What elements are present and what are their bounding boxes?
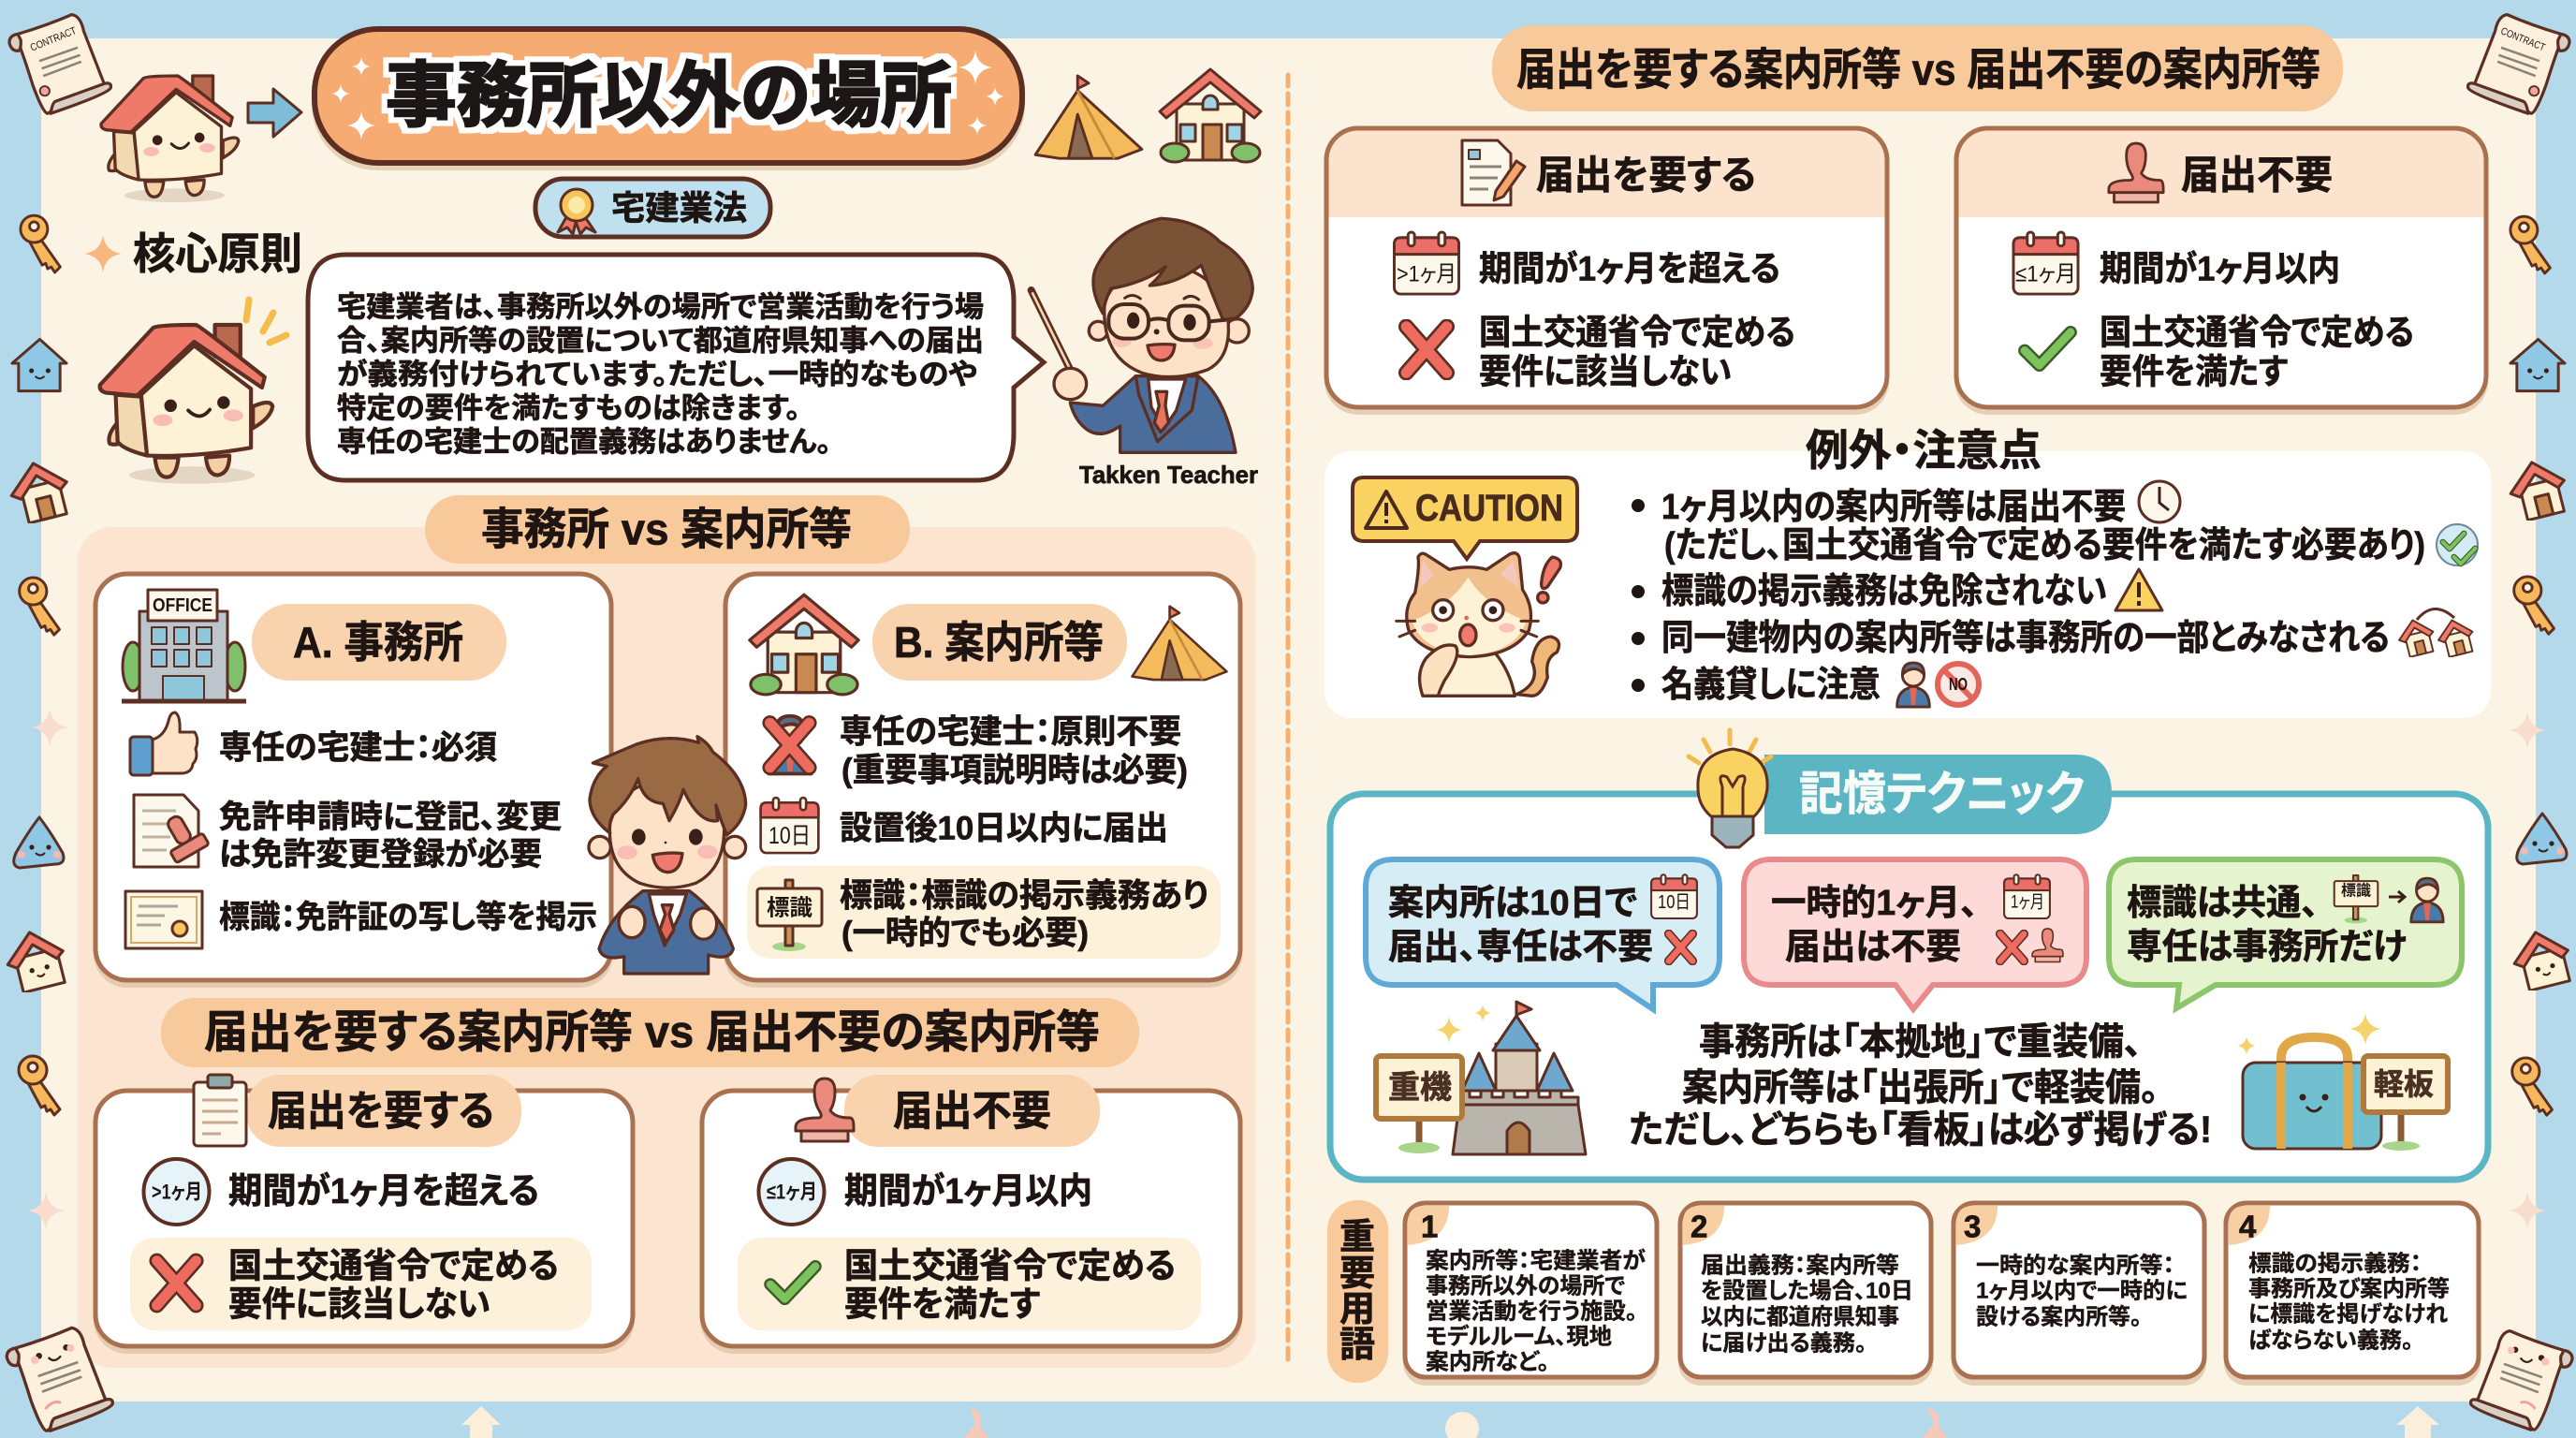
character: cheering boy <box>589 737 746 974</box>
bubble: 標識は共通: 専任は事務所だけ <box>2127 928 2407 967</box>
heading pill: 事務所 vs 案内所等 <box>425 495 910 564</box>
icon: suitcase with sign: 軽板 <box>2374 1067 2434 1101</box>
panel: 記憶テクニック <box>1330 730 2488 1180</box>
item: certificate: 標識：免許証の写し等を掲示 <box>219 900 597 935</box>
bubble: 案内所は10日で: 届出、専任は不要 <box>1388 928 1653 967</box>
heading pill: 記憶テクニック: 記憶テクニック <box>1799 768 2085 820</box>
term card 1: 1 <box>1421 1210 1438 1243</box>
pill: B. 案内所等: B. 案内所等 <box>894 618 1104 667</box>
list: exceptions: 同一建物内の案内所等は事務所の一部とみなされる <box>1661 619 2390 658</box>
character: Takken Teacher <box>1032 218 1258 489</box>
list: exceptions: (ただし、国土交通省令で定める要件を満たす必要あり) <box>1664 526 2425 565</box>
speech bubble: core principle: 宅建業者は、事務所以外の場所で営業活動を行う場 <box>337 290 984 324</box>
item: meeting requirement <box>738 1238 1201 1330</box>
item: not meeting requirement <box>1406 313 1795 391</box>
card: 届出不要 (right) <box>1954 128 2488 415</box>
speech bubble: core principle: 専任の宅建士の配置義務はありません。 <box>337 425 831 459</box>
icon: contract scroll top left: CONTRACT <box>29 25 79 54</box>
icon: house <box>750 594 858 695</box>
icon: clock <box>2139 481 2180 522</box>
item: within one month <box>2013 232 2340 294</box>
title banner: 事務所以外の場所 <box>386 56 952 137</box>
icon: tent <box>1133 607 1226 680</box>
bubble: 一時的1ヶ月: 1ヶ月 <box>2011 893 2044 912</box>
item: meeting requirement: 要件を満たす <box>844 1284 1040 1324</box>
card: 届出不要 <box>700 1075 1242 1354</box>
pill: 届出を要する <box>246 1075 521 1147</box>
heading pill: right side comparison: 届出を要する案内所等 vs 届出不要の案内所等 <box>1516 45 2320 94</box>
icon: person and no sign: NO <box>1949 675 1968 694</box>
term card 1: 事務所以外の場所で <box>1426 1273 1625 1299</box>
item: 10 day calendar <box>761 798 1168 853</box>
icon: stamp <box>796 1078 854 1141</box>
card B: 案内所等 <box>724 574 1242 988</box>
icon: suitcase with sign <box>2237 1013 2448 1151</box>
term card 3: 3 <box>1964 1210 1981 1243</box>
heading pill: right side comparison <box>1492 25 2343 111</box>
icon: person and no sign <box>1897 663 1979 707</box>
term card 4: 事務所及び案内所等 <box>2248 1277 2450 1301</box>
label: 重要用語 <box>1327 1200 1388 1383</box>
item: not meeting requirement <box>130 1238 592 1330</box>
item: meeting requirement: 要件を満たす <box>2100 352 2288 391</box>
item: meeting requirement: 国土交通省令で定める <box>844 1247 1176 1284</box>
item: thumbs up: 専任の宅建士：必須 <box>219 730 497 766</box>
heading: 届出不要: 届出不要 <box>2181 154 2333 197</box>
pill: 届出を要する: 届出を要する <box>268 1088 494 1135</box>
icon: castle with sign: 重機 <box>1388 1070 1452 1106</box>
term card 3: 設ける案内所等。 <box>1976 1305 2142 1329</box>
list: exceptions: 1ヶ月以内の案内所等は届出不要 <box>1661 488 2126 527</box>
label: 重要用語: 語 <box>1339 1326 1375 1365</box>
item: period over one month: >1ヶ月 <box>152 1180 202 1204</box>
text: mnemonic: 案内所等は「出張所」で軽装備。 <box>1682 1067 2159 1108</box>
heading pill: 届出 vs 不要 <box>161 998 1139 1067</box>
item: over one month <box>1394 232 1780 294</box>
heading: 届出を要する: 届出を要する <box>1536 154 1756 197</box>
bubble: 標識は共通: 標識は共通、 <box>2127 884 2319 923</box>
label: 重要用語: 要 <box>1339 1255 1375 1294</box>
list: exceptions <box>1632 488 2425 705</box>
list: exceptions: 標識の掲示義務は免除されない <box>1661 572 2107 611</box>
term card 1 <box>1403 1203 1659 1386</box>
item: not meeting requirement: 要件に該当しない <box>228 1284 490 1324</box>
term card 4: に標識を掲げなけれ <box>2248 1301 2448 1328</box>
speech bubble: core principle: 合、案内所等の設置について都道府県知事への届出 <box>337 324 984 358</box>
item: no dedicated agent <box>768 713 1188 788</box>
term card 4: 4 <box>2239 1210 2257 1243</box>
bubble: 案内所は10日で: 10日 <box>1658 892 1690 913</box>
callout: caution sign <box>1353 477 1577 559</box>
icon: office building: OFFICE <box>153 595 212 616</box>
bubble: 標識は共通: 標識 <box>2341 882 2371 899</box>
icon: contract scroll top left <box>9 15 110 113</box>
bubble: 一時的1ヶ月 <box>1744 859 2086 1009</box>
item: sign obligation: 標識 <box>767 895 812 921</box>
term card 3 <box>1952 1203 2206 1386</box>
text: mnemonic: ただし、どちらも「看板」は必ず掲げる! <box>1629 1109 2212 1151</box>
term card 1: 案内所等：宅建業者が <box>1426 1247 1646 1273</box>
item: over one month: >1ヶ月 <box>1397 262 1456 286</box>
item: no dedicated agent: (重要事項説明時は必要) <box>842 753 1188 788</box>
icon: two houses with arrow <box>2395 609 2477 659</box>
item: sign obligation: (一時的でも必要) <box>842 916 1089 951</box>
item: 10 day calendar: 設置後10日以内に届出 <box>840 811 1168 846</box>
item: 10 day calendar: 10日 <box>768 823 811 849</box>
bubble: 案内所は10日で: 案内所は10日で <box>1388 884 1637 923</box>
bubble: 案内所は10日で <box>1366 859 1720 1009</box>
label: 重要用語: 用 <box>1339 1290 1375 1329</box>
item: license document <box>134 795 562 873</box>
item: not meeting requirement: 国土交通省令で定める <box>1479 313 1795 352</box>
term card 4 <box>2224 1203 2481 1386</box>
term card 3: 一時的な案内所等： <box>1976 1253 2174 1279</box>
pill: 届出不要 <box>844 1075 1100 1147</box>
item: within one month: 期間が1ヶ月以内 <box>2100 249 2340 288</box>
term card 3: 1ヶ月以内で一時的に <box>1976 1279 2188 1303</box>
panel: 例外・注意点 <box>1325 426 2491 718</box>
bubble: 一時的1ヶ月: 届出は不要 <box>1785 928 1961 967</box>
tag: 宅建業法: 宅建業法 <box>611 189 747 227</box>
term card 2: 2 <box>1690 1210 1707 1243</box>
item: period over one month <box>144 1159 539 1225</box>
item: period within one month <box>758 1159 1092 1225</box>
bubble: 標識は共通 <box>2109 859 2462 1008</box>
icon: castle with sign <box>1376 1002 1586 1154</box>
term card 2 <box>1678 1203 1933 1386</box>
icon: stamp <box>2109 143 2163 202</box>
heading: 例外・注意点: 例外・注意点 <box>1806 426 2042 475</box>
icon: light bulb <box>1689 730 1771 847</box>
tag: 宅建業法 <box>535 179 770 237</box>
heading pill: 記憶テクニック <box>1764 755 2112 834</box>
term card 1: モデルルーム、現地 <box>1426 1324 1612 1350</box>
character: Takken Teacher: Takken Teacher <box>1079 461 1258 489</box>
label: 重要用語: 重 <box>1339 1218 1375 1257</box>
term card 1: 営業活動を行う施設。 <box>1426 1299 1637 1324</box>
term card 2: を設置した場合、10日 <box>1701 1279 1913 1303</box>
item: sign obligation <box>747 866 1221 959</box>
item: period within one month: 期間が1ヶ月以内 <box>844 1172 1092 1211</box>
icon: cheering house character <box>100 300 286 484</box>
panel: 重要用語 <box>1327 1200 2481 1386</box>
item: sign obligation: 標識：標識の掲示義務あり <box>840 878 1208 914</box>
icon: contract scroll top right <box>2468 15 2569 113</box>
card: 届出を要する (right) <box>1325 128 1889 415</box>
icon: tent and house <box>1035 69 1261 162</box>
text: mnemonic: 事務所は「本拠地」で重装備、 <box>1699 1021 2142 1063</box>
text: mnemonic <box>1629 1021 2212 1151</box>
icon: double check <box>2437 524 2478 565</box>
item: meeting requirement <box>2025 313 2414 391</box>
icon: office building <box>122 590 246 701</box>
heading: 核心原則: 核心原則 <box>133 229 302 278</box>
list: exceptions: 名義貸しに注意 <box>1661 666 1881 705</box>
icon: scroll character bottom right <box>2471 1331 2572 1430</box>
speech bubble: core principle: 特定の要件を満たすものは除きます。 <box>337 391 800 425</box>
card: 届出を要する <box>94 1075 635 1354</box>
bubble: 一時的1ヶ月: 一時的1ヶ月、 <box>1771 884 1978 923</box>
heading pill: 事務所 vs 案内所等: 事務所 vs 案内所等 <box>481 504 852 554</box>
item: period within one month: ≤1ヶ月 <box>767 1180 817 1204</box>
item: thumbs up <box>130 712 497 775</box>
card A: 事務所 <box>94 574 613 988</box>
pill: A. 事務所 <box>252 604 506 681</box>
character: surprised cat <box>1397 553 1560 696</box>
item: certificate <box>125 891 597 948</box>
item: over one month: 期間が1ヶ月を超える <box>1479 249 1780 288</box>
term card 2: に届け出る義務。 <box>1701 1331 1866 1356</box>
pill: B. 案内所等 <box>872 604 1127 681</box>
pill: 届出不要: 届出不要 <box>893 1088 1051 1135</box>
heading pill: 届出 vs 不要: 届出を要する案内所等 vs 届出不要の案内所等 <box>204 1007 1100 1058</box>
icon: house character with arrow <box>101 76 301 202</box>
icon: contract scroll top right: CONTRACT <box>2499 25 2547 53</box>
item: license document: は免許変更登録が必要 <box>219 836 542 873</box>
item: license document: 免許申請時に登記、変更 <box>219 800 562 835</box>
callout: caution sign: CAUTION <box>1415 488 1563 529</box>
item: not meeting requirement: 要件に該当しない <box>1479 352 1732 391</box>
item: period over one month: 期間が1ヶ月を超える <box>228 1172 539 1211</box>
icon: document and pen <box>1462 140 1525 205</box>
speech bubble: core principle: が義務付けられています。ただし、一時的なものや <box>337 358 977 391</box>
item: not meeting requirement: 国土交通省令で定める <box>228 1247 559 1284</box>
icon: warning triangle <box>2115 569 2162 610</box>
speech bubble: core principle <box>308 255 1044 480</box>
item: meeting requirement: 国土交通省令で定める <box>2100 313 2414 352</box>
term card 2: 届出義務：案内所等 <box>1701 1253 1899 1279</box>
term card 2: 以内に都道府県知事 <box>1701 1305 1899 1329</box>
pill: A. 事務所: A. 事務所 <box>293 618 463 667</box>
term card 4: ばならない義務。 <box>2248 1328 2413 1354</box>
item: within one month: ≤1ヶ月 <box>2015 262 2076 286</box>
icon: scroll character bottom left <box>7 1328 112 1431</box>
panel: 事務所 vs 案内所等 section <box>78 495 1255 1368</box>
term card 1: 案内所など。 <box>1426 1350 1549 1374</box>
icon: clipboard <box>194 1075 246 1146</box>
term card 4: 標識の掲示義務： <box>2248 1251 2422 1277</box>
item: no dedicated agent: 専任の宅建士：原則不要 <box>840 713 1181 751</box>
title banner <box>312 29 1025 170</box>
